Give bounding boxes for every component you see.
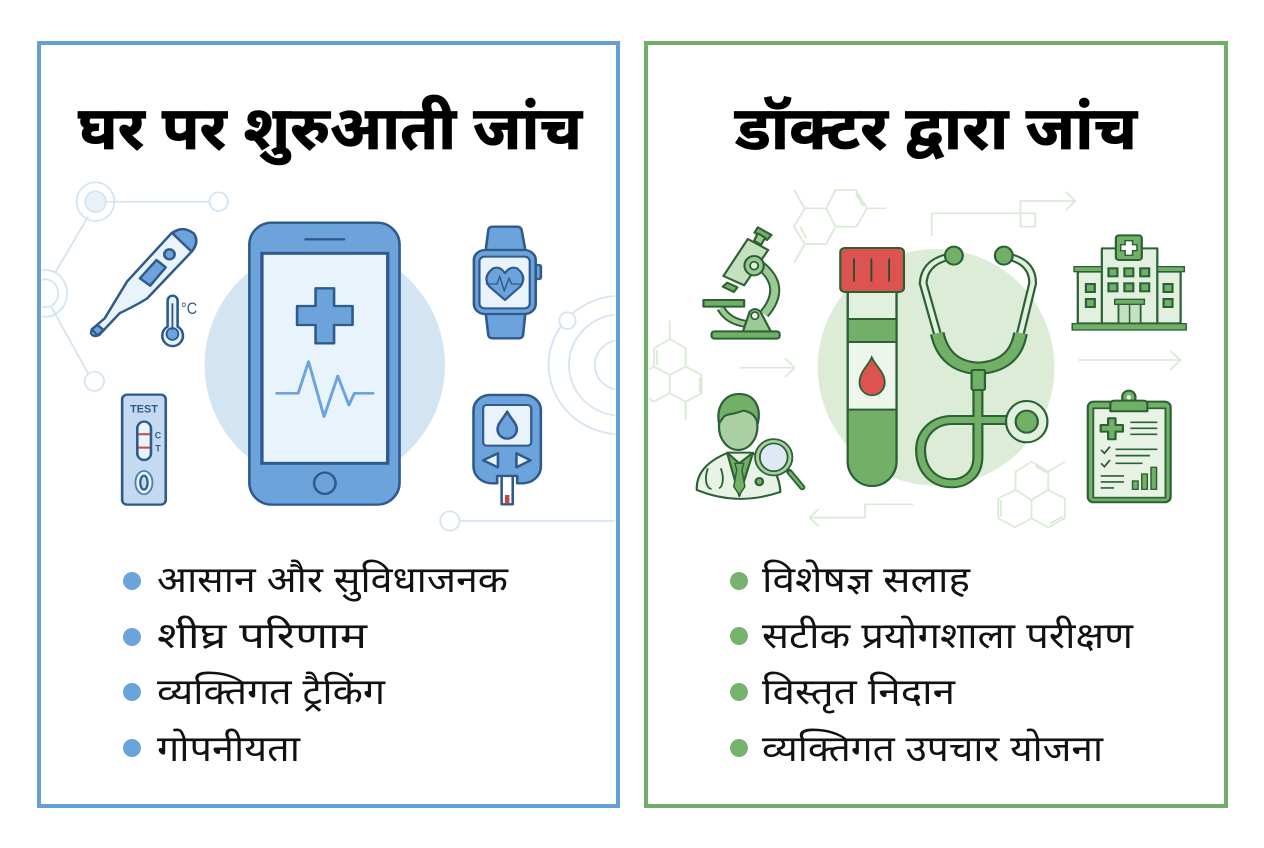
icon: smartphone bbox=[249, 223, 400, 505]
bullet item 3: व्यक्तिगत ट्रैकिंग bbox=[157, 671, 386, 712]
list: doctor benefits bbox=[730, 559, 1134, 769]
icon: clipboard report bbox=[1088, 391, 1171, 502]
icon: doctor with magnifier bbox=[697, 394, 802, 499]
icon: rapid test cassette: TEST bbox=[130, 404, 158, 416]
bullet item 4: व्यक्तिगत उपचार योजना bbox=[762, 728, 1104, 769]
bullet item 2: शीघ्र परिणाम bbox=[157, 615, 369, 656]
icon: digital thermometer bbox=[91, 229, 196, 336]
bullet item 1: आसान और सुविधाजनक bbox=[157, 559, 509, 602]
icon: microscope bbox=[703, 227, 780, 339]
icon: blood test tube bbox=[840, 248, 904, 486]
icon: rapid test cassette: T bbox=[155, 443, 161, 453]
icon: stethoscope bbox=[921, 247, 1047, 483]
backdrop circle bbox=[205, 245, 445, 485]
heading: doctor screening: डॉक्टर द्वारा जांच bbox=[734, 95, 1138, 162]
icon: rapid test cassette: C bbox=[155, 431, 162, 441]
icon: smartwatch bbox=[474, 227, 541, 338]
illustration: home devices bbox=[42, 182, 616, 532]
bullet item 2 bbox=[123, 615, 369, 656]
icon: small thermometer with celsius bbox=[162, 296, 197, 346]
bullet item 2: सटीक प्रयोगशाला परीक्षण bbox=[762, 615, 1134, 656]
bullet item 4: गोपनीयता bbox=[157, 728, 301, 769]
heading: home screening: घर पर शुरुआती जांच bbox=[78, 95, 583, 166]
background network pattern bbox=[42, 182, 616, 532]
icon: hospital bbox=[1072, 235, 1186, 330]
panel: home screening bbox=[37, 41, 620, 808]
background molecules and arrows bbox=[649, 190, 1181, 527]
backdrop circle bbox=[818, 249, 1054, 486]
bullet item 1: विशेषज्ञ सलाह bbox=[762, 559, 971, 600]
illustration: clinical items bbox=[649, 190, 1186, 527]
icon: small thermometer with celsius: °C bbox=[181, 299, 197, 318]
bullet item 3: विस्तृत निदान bbox=[762, 671, 956, 714]
list: home benefits bbox=[123, 559, 509, 769]
icon: rapid test cassette bbox=[122, 395, 166, 505]
icon: glucose meter bbox=[474, 395, 541, 504]
panel: doctor screening bbox=[646, 43, 1226, 806]
